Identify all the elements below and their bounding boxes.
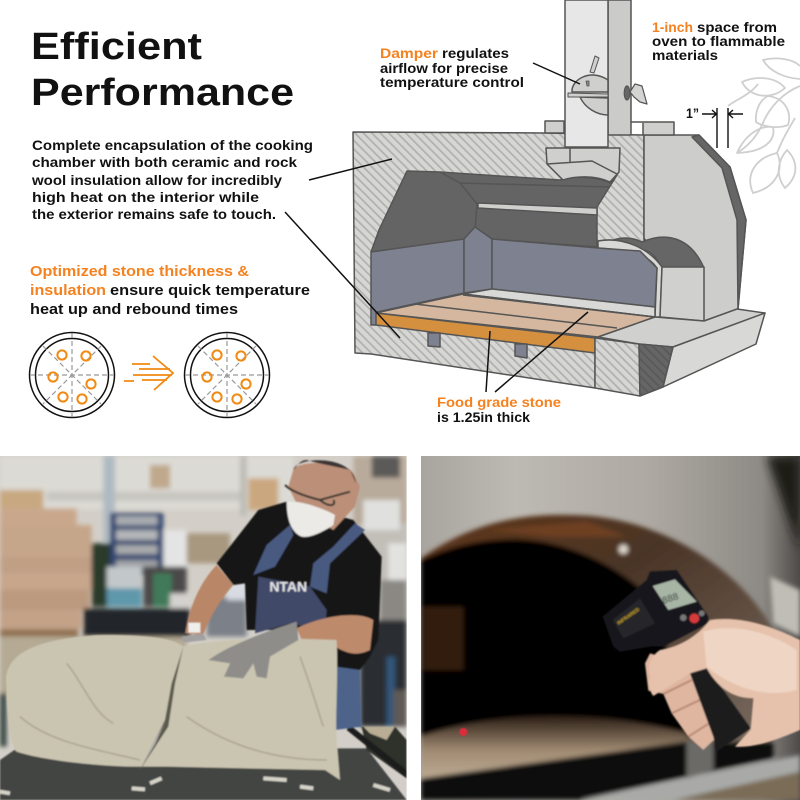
text block: optimized stone thickness: Optimized stone thickness & xyxy=(30,264,250,280)
label: one inch clearance: oven to flammable xyxy=(652,34,786,49)
near glove xyxy=(208,622,298,678)
label: damper: regulates xyxy=(442,46,509,61)
title: Performance xyxy=(31,72,294,114)
overalls bib xyxy=(255,577,327,633)
interior back wall xyxy=(492,239,657,307)
title xyxy=(31,26,294,114)
label: one inch clearance: space from xyxy=(697,20,777,35)
text block: encapsulation description xyxy=(31,138,313,222)
text block: encapsulation description: high heat on the interior while xyxy=(32,190,260,205)
arch of oven door xyxy=(598,237,704,268)
label: one inch clearance: 1-inch xyxy=(652,20,693,35)
interior centre wall xyxy=(464,227,492,293)
oven exterior side xyxy=(644,135,746,321)
text block: optimized stone thickness: insulation xyxy=(30,283,106,299)
shirt xyxy=(217,502,382,670)
mask xyxy=(287,501,335,537)
interior ceiling xyxy=(371,171,617,252)
palm and thumb xyxy=(649,619,800,747)
callout lines xyxy=(285,63,588,392)
chamber xyxy=(421,539,693,743)
laser dot xyxy=(459,728,467,736)
thermometer handle xyxy=(690,667,751,752)
icon: pizza after xyxy=(184,332,270,418)
oven insulation body xyxy=(353,132,644,388)
oven mouth surround xyxy=(421,515,773,750)
dimension: one inch xyxy=(686,105,743,148)
thermometer screen xyxy=(653,579,697,610)
text block: encapsulation description: chamber with both ceramic and rock xyxy=(32,155,298,170)
icon: leaves xyxy=(728,58,800,193)
photo: infrared thermometer at oven: 888 xyxy=(661,591,681,607)
label: damper xyxy=(380,46,524,90)
label: food grade stone: is 1.25in thick xyxy=(437,410,531,425)
oven side trim xyxy=(692,135,746,309)
ledge front xyxy=(663,313,765,387)
throat xyxy=(546,148,620,182)
damper xyxy=(568,56,608,115)
icon: pizza before xyxy=(30,332,114,418)
hatched front pier xyxy=(595,338,640,396)
rock wool roll xyxy=(6,635,340,780)
near arm xyxy=(297,615,373,654)
text block: encapsulation description: the exterior remains safe to touch. xyxy=(32,207,276,222)
ledge shadow xyxy=(639,344,673,396)
photo: worker cutting rock wool xyxy=(0,456,407,800)
label: damper: temperature control xyxy=(380,75,524,90)
thermometer body xyxy=(603,570,708,652)
flue side xyxy=(608,0,631,135)
far glove xyxy=(182,633,207,643)
ledge top xyxy=(598,309,765,347)
ceiling light bar xyxy=(478,203,597,215)
label: food grade stone: Food grade stone xyxy=(437,395,562,410)
oven floor xyxy=(421,716,687,778)
stone front edge xyxy=(376,313,595,353)
wrist bandage xyxy=(188,623,200,633)
label: food grade stone xyxy=(437,395,562,425)
photo: infrared thermometer at oven: INFRARED xyxy=(616,607,641,627)
interior left wall xyxy=(371,239,464,325)
label: one inch clearance xyxy=(652,20,786,63)
text block: optimized stone thickness: heat up and rebound times xyxy=(30,302,238,318)
under floor vents xyxy=(428,333,527,358)
glasses xyxy=(285,485,350,505)
title: Efficient xyxy=(31,26,202,68)
right collar xyxy=(631,122,674,135)
knife xyxy=(142,724,164,765)
shirt print: NTAN xyxy=(269,579,307,595)
far arm xyxy=(185,565,233,635)
door pier xyxy=(660,267,704,321)
diagram: oven cutaway xyxy=(353,0,765,396)
door reveal xyxy=(598,240,662,317)
overalls legs xyxy=(335,663,362,730)
stone joints xyxy=(415,295,655,328)
photo: infrared thermometer at oven xyxy=(421,456,800,800)
fingers xyxy=(645,653,717,750)
dimension: one inch: 1” xyxy=(686,105,699,121)
flue front xyxy=(565,0,608,147)
label: damper: Damper xyxy=(380,46,439,61)
rear floor strip xyxy=(463,289,655,317)
dark corner xyxy=(767,456,800,550)
thermometer label xyxy=(613,598,655,638)
text block: encapsulation description: Complete encapsulation of the cooking xyxy=(32,138,313,153)
stone top xyxy=(376,294,655,337)
table xyxy=(0,748,407,800)
left collar xyxy=(545,121,564,133)
icon: speed arrow xyxy=(124,356,173,390)
ceiling lines xyxy=(440,172,609,230)
label: one inch clearance: materials xyxy=(652,48,718,63)
head xyxy=(288,463,360,530)
trigger button xyxy=(689,613,699,623)
damper knob xyxy=(624,84,647,104)
label: damper: airflow for precise xyxy=(380,61,509,76)
wool scraps xyxy=(0,778,390,793)
text block: optimized stone thickness xyxy=(30,264,310,318)
throat detail xyxy=(547,148,617,174)
text block: encapsulation description: wool insulation allow for incredibly xyxy=(31,173,283,188)
front lip xyxy=(421,742,773,800)
text block: optimized stone thickness: ensure quick temperature xyxy=(110,283,310,299)
